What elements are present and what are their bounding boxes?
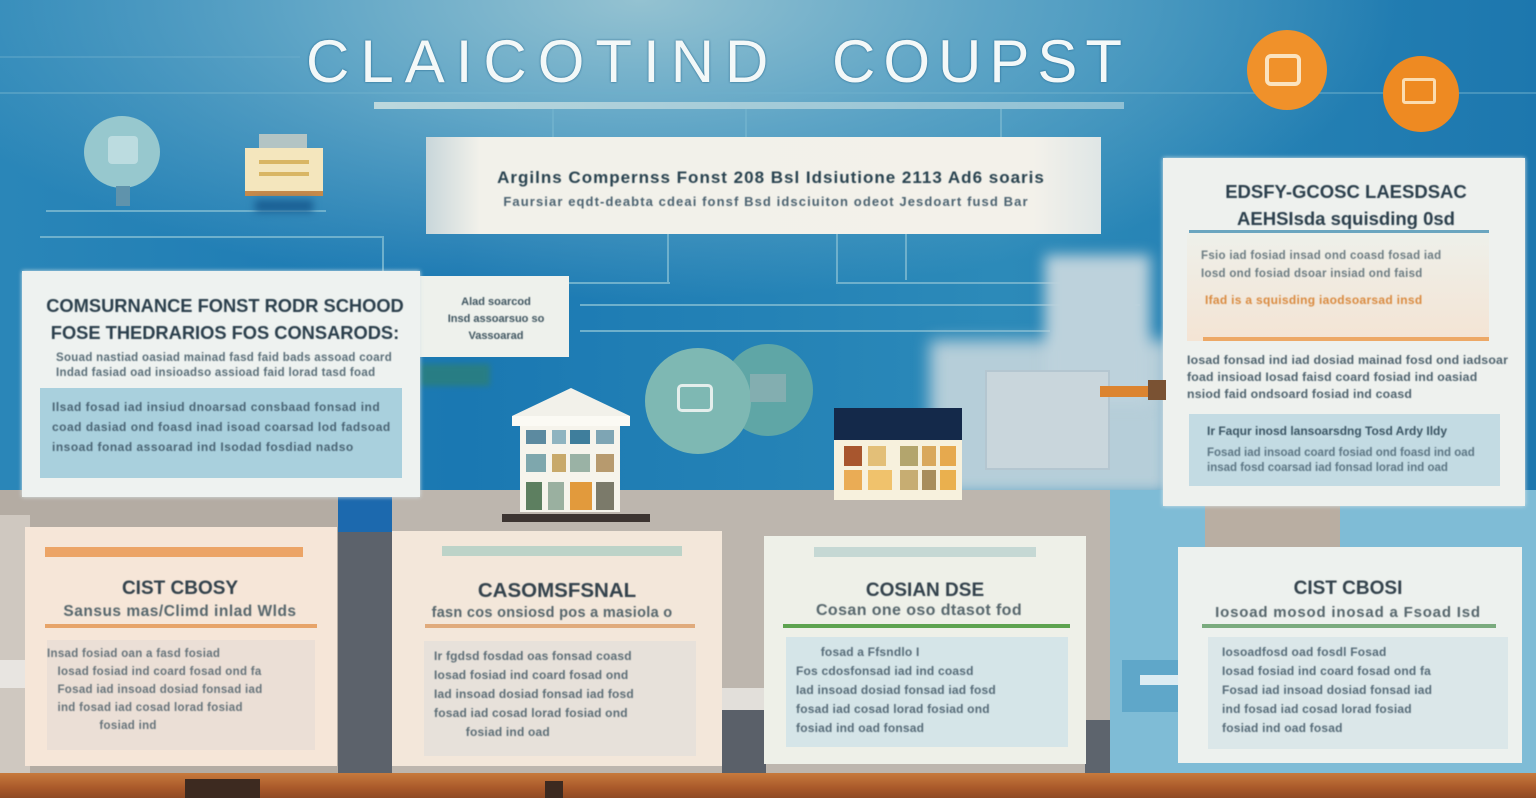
card inner text xyxy=(424,641,696,756)
summary line one: Argilns Compernss Fonst 208 Bsl Idsiutione 2113 Ad6 soaris xyxy=(497,168,1045,187)
tinted intro: Fsio iad fosiad insad ond coasd fosad iad xyxy=(1201,250,1441,262)
card inner text: fosiad ind xyxy=(99,720,157,732)
orange top bar xyxy=(45,547,303,557)
card rule xyxy=(783,624,1070,628)
panel: right main xyxy=(1163,158,1525,506)
card inner text: fosiad ind oad fonsad xyxy=(796,721,924,735)
card subheading: Sansus mas/Climd inlad Wlds xyxy=(63,603,297,620)
card inner text: Iad insoad dosiad fonsad iad fosd xyxy=(434,687,634,701)
card inner text: ind fosad iad cosad lorad fosiad xyxy=(57,702,243,714)
icon: orange badge right xyxy=(1383,56,1459,132)
orange rule xyxy=(1203,337,1489,341)
card inner text: fosad a Ffsndlo I xyxy=(821,645,919,659)
icon: calendar grid xyxy=(834,408,962,500)
card inner text xyxy=(47,640,315,750)
panel body xyxy=(56,351,392,379)
tinted intro: Iosd ond fosiad dsoar insiad ond faisd xyxy=(1201,268,1423,280)
card inner text: fosiad ind oad fosad xyxy=(1222,721,1343,735)
card rule xyxy=(425,624,695,628)
note text: Alad soarcod xyxy=(461,296,531,308)
card inner text: Iad insoad dosiad fonsad iad fosd xyxy=(796,683,996,697)
card inner text: Ir fgdsd fosdad oas fonsad coasd xyxy=(434,649,632,663)
decorative plant xyxy=(420,364,490,386)
icon: columned building xyxy=(502,388,650,522)
icon: small laptop xyxy=(1122,660,1178,712)
card inner text: Fosad iad insoad dosiad fonsad iad xyxy=(57,684,263,696)
callout: insad fosd coarsad iad fonsad lorad ind oad xyxy=(1207,462,1448,474)
card inner text: Iosad fosiad ind coard fosad ond fa xyxy=(57,666,262,678)
panel callout: Ilsad fosad iad insiud dnoarsad consbaad fonsad ind xyxy=(52,400,380,414)
panel: left main xyxy=(22,271,420,497)
orange highlight line: Ifad is a squisding iaodsoarsad insd xyxy=(1205,293,1423,307)
panel callout: insoad fonad assoarad ind Isodad fosdiad nadso xyxy=(52,440,354,454)
card inner text: fosad iad cosad lorad fosiad ond xyxy=(434,706,628,720)
card inner text: Iosad fosiad ind coard fosad ond xyxy=(434,668,628,682)
panel heading: EDSFY-GCOSC LAESDSAC xyxy=(1225,181,1467,202)
card heading: CIST CBOSI xyxy=(1294,578,1402,599)
callout: Ir Faqur inosd lansoarsdng Tosd Ardy Ildy xyxy=(1207,424,1447,438)
icon: teal speech bulb xyxy=(84,116,160,206)
body text xyxy=(1186,353,1508,401)
card inner text: fosiad ind oad xyxy=(466,725,550,739)
panel: top summary xyxy=(426,137,1101,234)
card inner text: ind fosad iad cosad lorad fosiad xyxy=(1222,702,1412,716)
summary line two: Faursiar eqdt-deabta cdeai fonsf Bsd idsciuiton odeot Jesdoart fusd Bar xyxy=(503,194,1029,209)
card inner text xyxy=(786,637,1068,747)
panel: bottom card 2 xyxy=(392,531,722,766)
bottom wall band xyxy=(0,490,1536,773)
panel: bottom card 4 xyxy=(1178,547,1522,763)
card heading: CIST CBOSY xyxy=(122,578,238,599)
tinted intro xyxy=(1187,233,1489,341)
panel: bottom card 3 xyxy=(764,536,1086,764)
panel heading xyxy=(46,295,404,343)
card subheading: Iosoad mosod inosad a Fsoad Isd xyxy=(1215,604,1481,621)
body text: foad insioad Iosad faisd coard fosiad ind oasiad xyxy=(1187,370,1477,384)
card heading: COSIAN DSE xyxy=(866,580,984,601)
card inner text: Iosoadfosd oad fosdl Fosad xyxy=(1222,645,1387,659)
card inner text: Fos cdosfonsad iad ind coasd xyxy=(796,664,974,678)
card inner text xyxy=(1208,637,1508,749)
panel: small note xyxy=(420,276,569,357)
panel heading: AEHSIsda squisding 0sd xyxy=(1237,208,1455,229)
callout xyxy=(1189,414,1500,486)
icon: orange pointer arrow xyxy=(1100,380,1166,400)
card inner text: Iosad fosiad ind coard fosad ond fa xyxy=(1222,664,1431,678)
card inner text: fosad iad cosad lorad fosiad ond xyxy=(796,702,990,716)
card rule xyxy=(1202,624,1496,628)
panel heading: COMSURNANCE FONST RODR SCHOOD xyxy=(46,295,404,316)
panel: bottom card 1 xyxy=(25,527,337,766)
teal top bar xyxy=(814,547,1036,557)
panel body: Souad nastiad oasiad mainad fasd faid bads assoad coard xyxy=(56,352,392,364)
body text: nsiod faid ondsoard fosiad ind coasd xyxy=(1187,387,1412,401)
teal top bar xyxy=(442,546,682,556)
title underline xyxy=(374,102,1124,109)
panel body: Indad fasiad oad insioadso assioad faid lorad tasd foad xyxy=(56,367,375,379)
note text xyxy=(448,296,545,342)
card rule xyxy=(45,624,317,628)
note text: Vassoarad xyxy=(468,330,524,342)
panel callout: coad dasiad ond foasd inad isoad coarsad lod fadsoad xyxy=(52,420,391,434)
panel callout xyxy=(40,388,402,478)
panel heading xyxy=(1225,181,1467,230)
card inner text: Insad fosiad oan a fasd fosiad xyxy=(47,648,220,660)
card subheading: fasn cos onsiosd pos a masiola o xyxy=(432,605,672,621)
heading rule xyxy=(1189,230,1489,233)
panel heading: FOSE THEDRARIOS FOS CONSARODS: xyxy=(51,322,399,343)
card subheading: Cosan one oso dtasot fod xyxy=(816,602,1022,619)
icon: twin chat bubbles xyxy=(645,344,813,454)
callout: Fosad iad insoad coard fosiad ond foasd ind oad xyxy=(1207,447,1475,459)
cloud backdrop xyxy=(918,244,1163,490)
note text: Insd assoarsuo so xyxy=(448,313,544,325)
card inner text: Fosad iad insoad dosiad fonsad iad xyxy=(1222,683,1432,697)
icon: orange badge left xyxy=(1247,30,1327,110)
title xyxy=(306,30,1130,94)
wooden floor xyxy=(0,773,1536,798)
body text: Iosad fonsad ind iad dosiad mainad fosd ond iadsoar xyxy=(1187,353,1508,367)
icon: note card xyxy=(245,134,323,216)
